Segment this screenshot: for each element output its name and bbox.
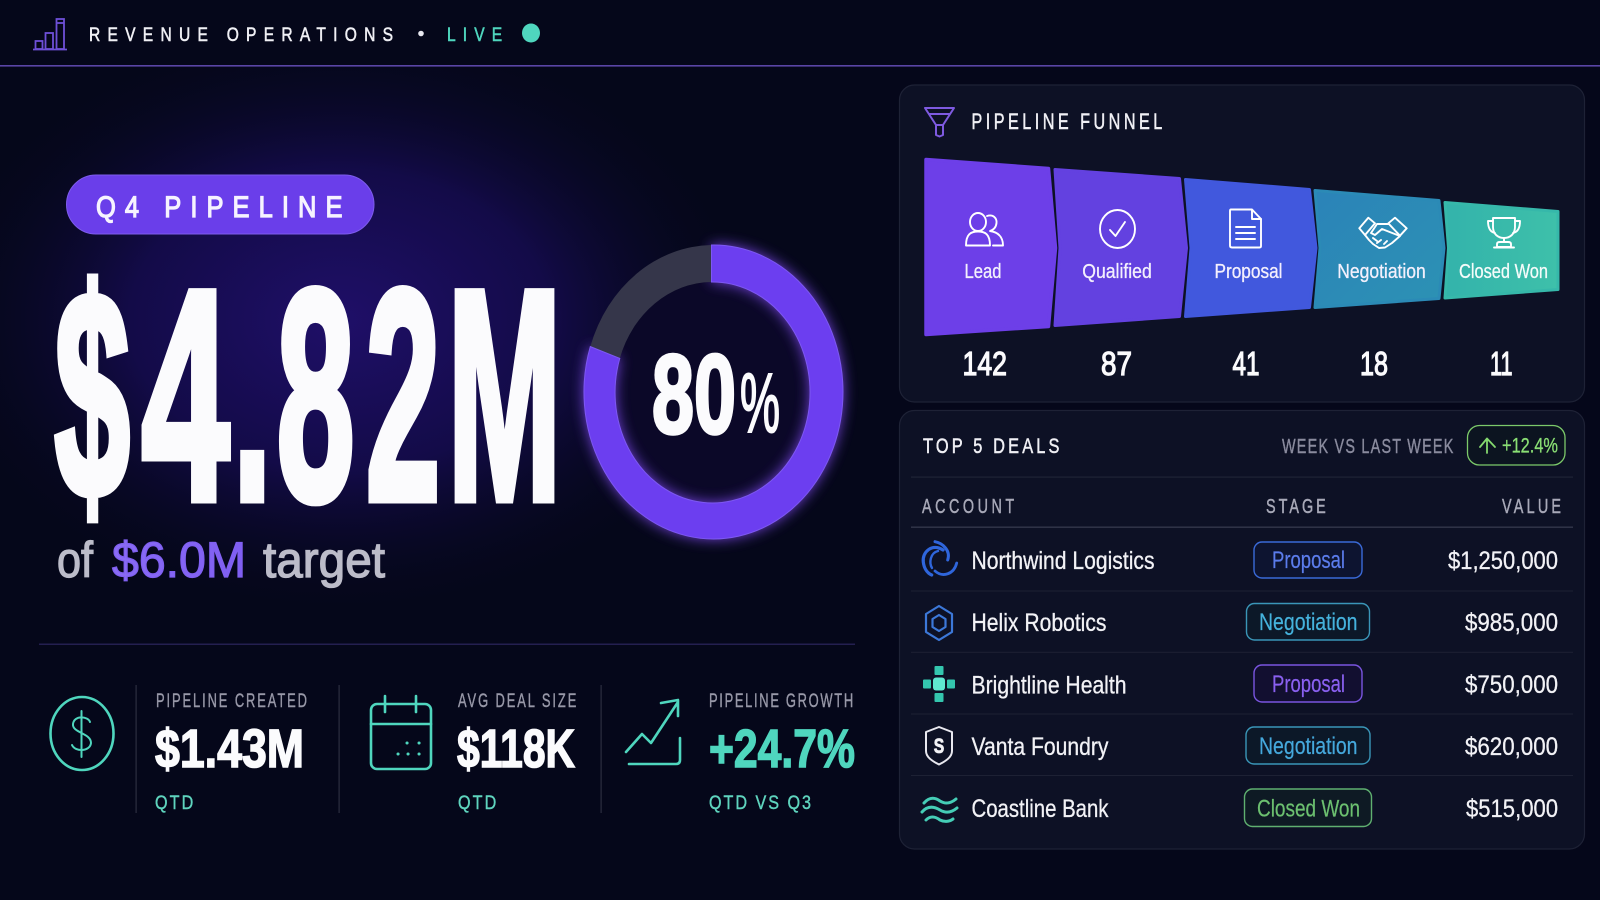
- separator dot: [418, 31, 424, 36]
- header title: REVENUE OPERATIONS: [89, 23, 393, 45]
- row: Helix Robotics: Helix Robotics: [972, 609, 1106, 637]
- row: Brightline Health: Proposal: [1272, 671, 1345, 698]
- row: Vanta Foundry: Vanta Foundry: [972, 733, 1109, 761]
- KPI: pipeline created: QTD: [155, 792, 193, 813]
- icon: bar chart logo: [33, 19, 67, 50]
- row: Vanta Foundry: $620,000: [1465, 733, 1558, 761]
- icon: dollar coin: [50, 697, 114, 770]
- panel: pipeline funnel: [900, 85, 1584, 402]
- KPI: average deal size: QTD: [458, 792, 496, 813]
- KPI: pipeline growth: QTD VS Q3: [709, 792, 811, 813]
- icon: funnel: [925, 108, 954, 136]
- row: Northwind Logistics: Northwind Logistics: [972, 547, 1154, 575]
- KPI: average deal size: $118K: [457, 719, 575, 779]
- pill: Q4 pipeline: Q4 PIPELINE: [96, 190, 343, 223]
- big number: .: [233, 227, 272, 563]
- row: Brightline Health: $750,000: [1465, 671, 1558, 699]
- funnel stage: Qualified: Qualified: [1082, 261, 1152, 283]
- row: Northwind Logistics: $1,250,000: [1448, 547, 1558, 575]
- table header: STAGE: [1266, 495, 1326, 518]
- KPI: pipeline growth: +24.7%: [709, 719, 855, 779]
- row: Vanta Foundry: [926, 727, 1558, 764]
- target line: of: [57, 532, 93, 588]
- funnel stage: Proposal: 41: [1232, 345, 1260, 382]
- target line: [57, 532, 385, 588]
- row: Coastline Bank: Closed Won: [1257, 796, 1360, 822]
- donut chart: 80%: [584, 245, 843, 539]
- funnel stage: Lead: Lead: [964, 261, 1002, 283]
- funnel stage: Closed Won: Closed Won: [1459, 261, 1548, 283]
- donut chart: 80%: %: [740, 356, 780, 450]
- live indicator: [522, 24, 540, 42]
- donut chart: 80%: 80: [652, 332, 736, 457]
- KPI: pipeline growth: PIPELINE GROWTH: [709, 691, 853, 712]
- row: Brightline Health: [923, 665, 1558, 702]
- funnel stage: Qualified: 87: [1101, 345, 1132, 382]
- big number: 4: [142, 227, 230, 563]
- funnel stage: Lead: 142: [962, 345, 1007, 382]
- funnel stage: Qualified: [1055, 170, 1186, 382]
- funnel stage: Proposal: [1186, 180, 1316, 382]
- KPI: average deal size: AVG DEAL SIZE: [458, 691, 576, 712]
- funnel stage: Lead: [926, 160, 1056, 382]
- hero: Q4 pipeline: [54, 175, 843, 588]
- comparison label: WEEK VS LAST WEEK: [1282, 435, 1454, 458]
- KPI: average deal size: [338, 685, 576, 813]
- badge: +12.4%: +12.4%: [1502, 434, 1558, 458]
- row: Vanta Foundry: Negotiation: [1259, 733, 1358, 760]
- table header: VALUE: [1502, 495, 1561, 518]
- row: Coastline Bank: $515,000: [1466, 795, 1558, 823]
- badge: +12.4%: [1468, 426, 1565, 465]
- KPI: pipeline created: $1.43M: [155, 719, 304, 779]
- funnel stage: Proposal: Proposal: [1214, 261, 1282, 283]
- row: Northwind Logistics: Proposal: [1272, 547, 1345, 574]
- live label: LIVE: [447, 23, 502, 45]
- KPI: pipeline created: PIPELINE CREATED: [156, 691, 307, 712]
- hero: Q4 pipeline: M: [448, 227, 562, 563]
- table header: ACCOUNT: [922, 495, 1014, 518]
- big number: 8: [277, 227, 355, 563]
- row: Coastline Bank: [922, 789, 1558, 826]
- pill: Q4 pipeline: [66, 175, 374, 234]
- funnel stage: Closed Won: 11: [1490, 345, 1512, 382]
- row: Northwind Logistics: [923, 542, 1558, 578]
- target line: $6.0M: [112, 532, 246, 588]
- table header: [922, 495, 1561, 518]
- row: Vanta Foundry: S: [934, 734, 944, 758]
- panel: top 5 deals: [900, 410, 1584, 849]
- target line: target: [263, 532, 385, 588]
- KPI: pipeline growth: [600, 685, 855, 813]
- funnel stage: Negotiation: 18: [1360, 345, 1388, 382]
- funnel stage: Closed Won: [1445, 202, 1558, 382]
- header bar: [33, 19, 540, 50]
- row: Brightline Health: Brightline Health: [972, 672, 1126, 700]
- deals heading: TOP 5 DEALS: [923, 434, 1059, 457]
- funnel heading: PIPELINE FUNNEL: [972, 109, 1162, 135]
- icon: growth arrow: [626, 700, 680, 764]
- row: Helix Robotics: Negotiation: [1259, 609, 1358, 636]
- row: Helix Robotics: $985,000: [1465, 609, 1558, 637]
- KPI: pipeline created: [50, 685, 307, 813]
- funnel stage: Negotiation: Negotiation: [1337, 261, 1426, 283]
- icon: calendar: [371, 696, 431, 769]
- big number: $: [54, 230, 130, 560]
- row: Coastline Bank: Coastline Bank: [972, 795, 1109, 823]
- big number: 2: [366, 227, 440, 563]
- funnel stage: Negotiation: [1315, 190, 1444, 382]
- row: Helix Robotics: [926, 604, 1558, 640]
